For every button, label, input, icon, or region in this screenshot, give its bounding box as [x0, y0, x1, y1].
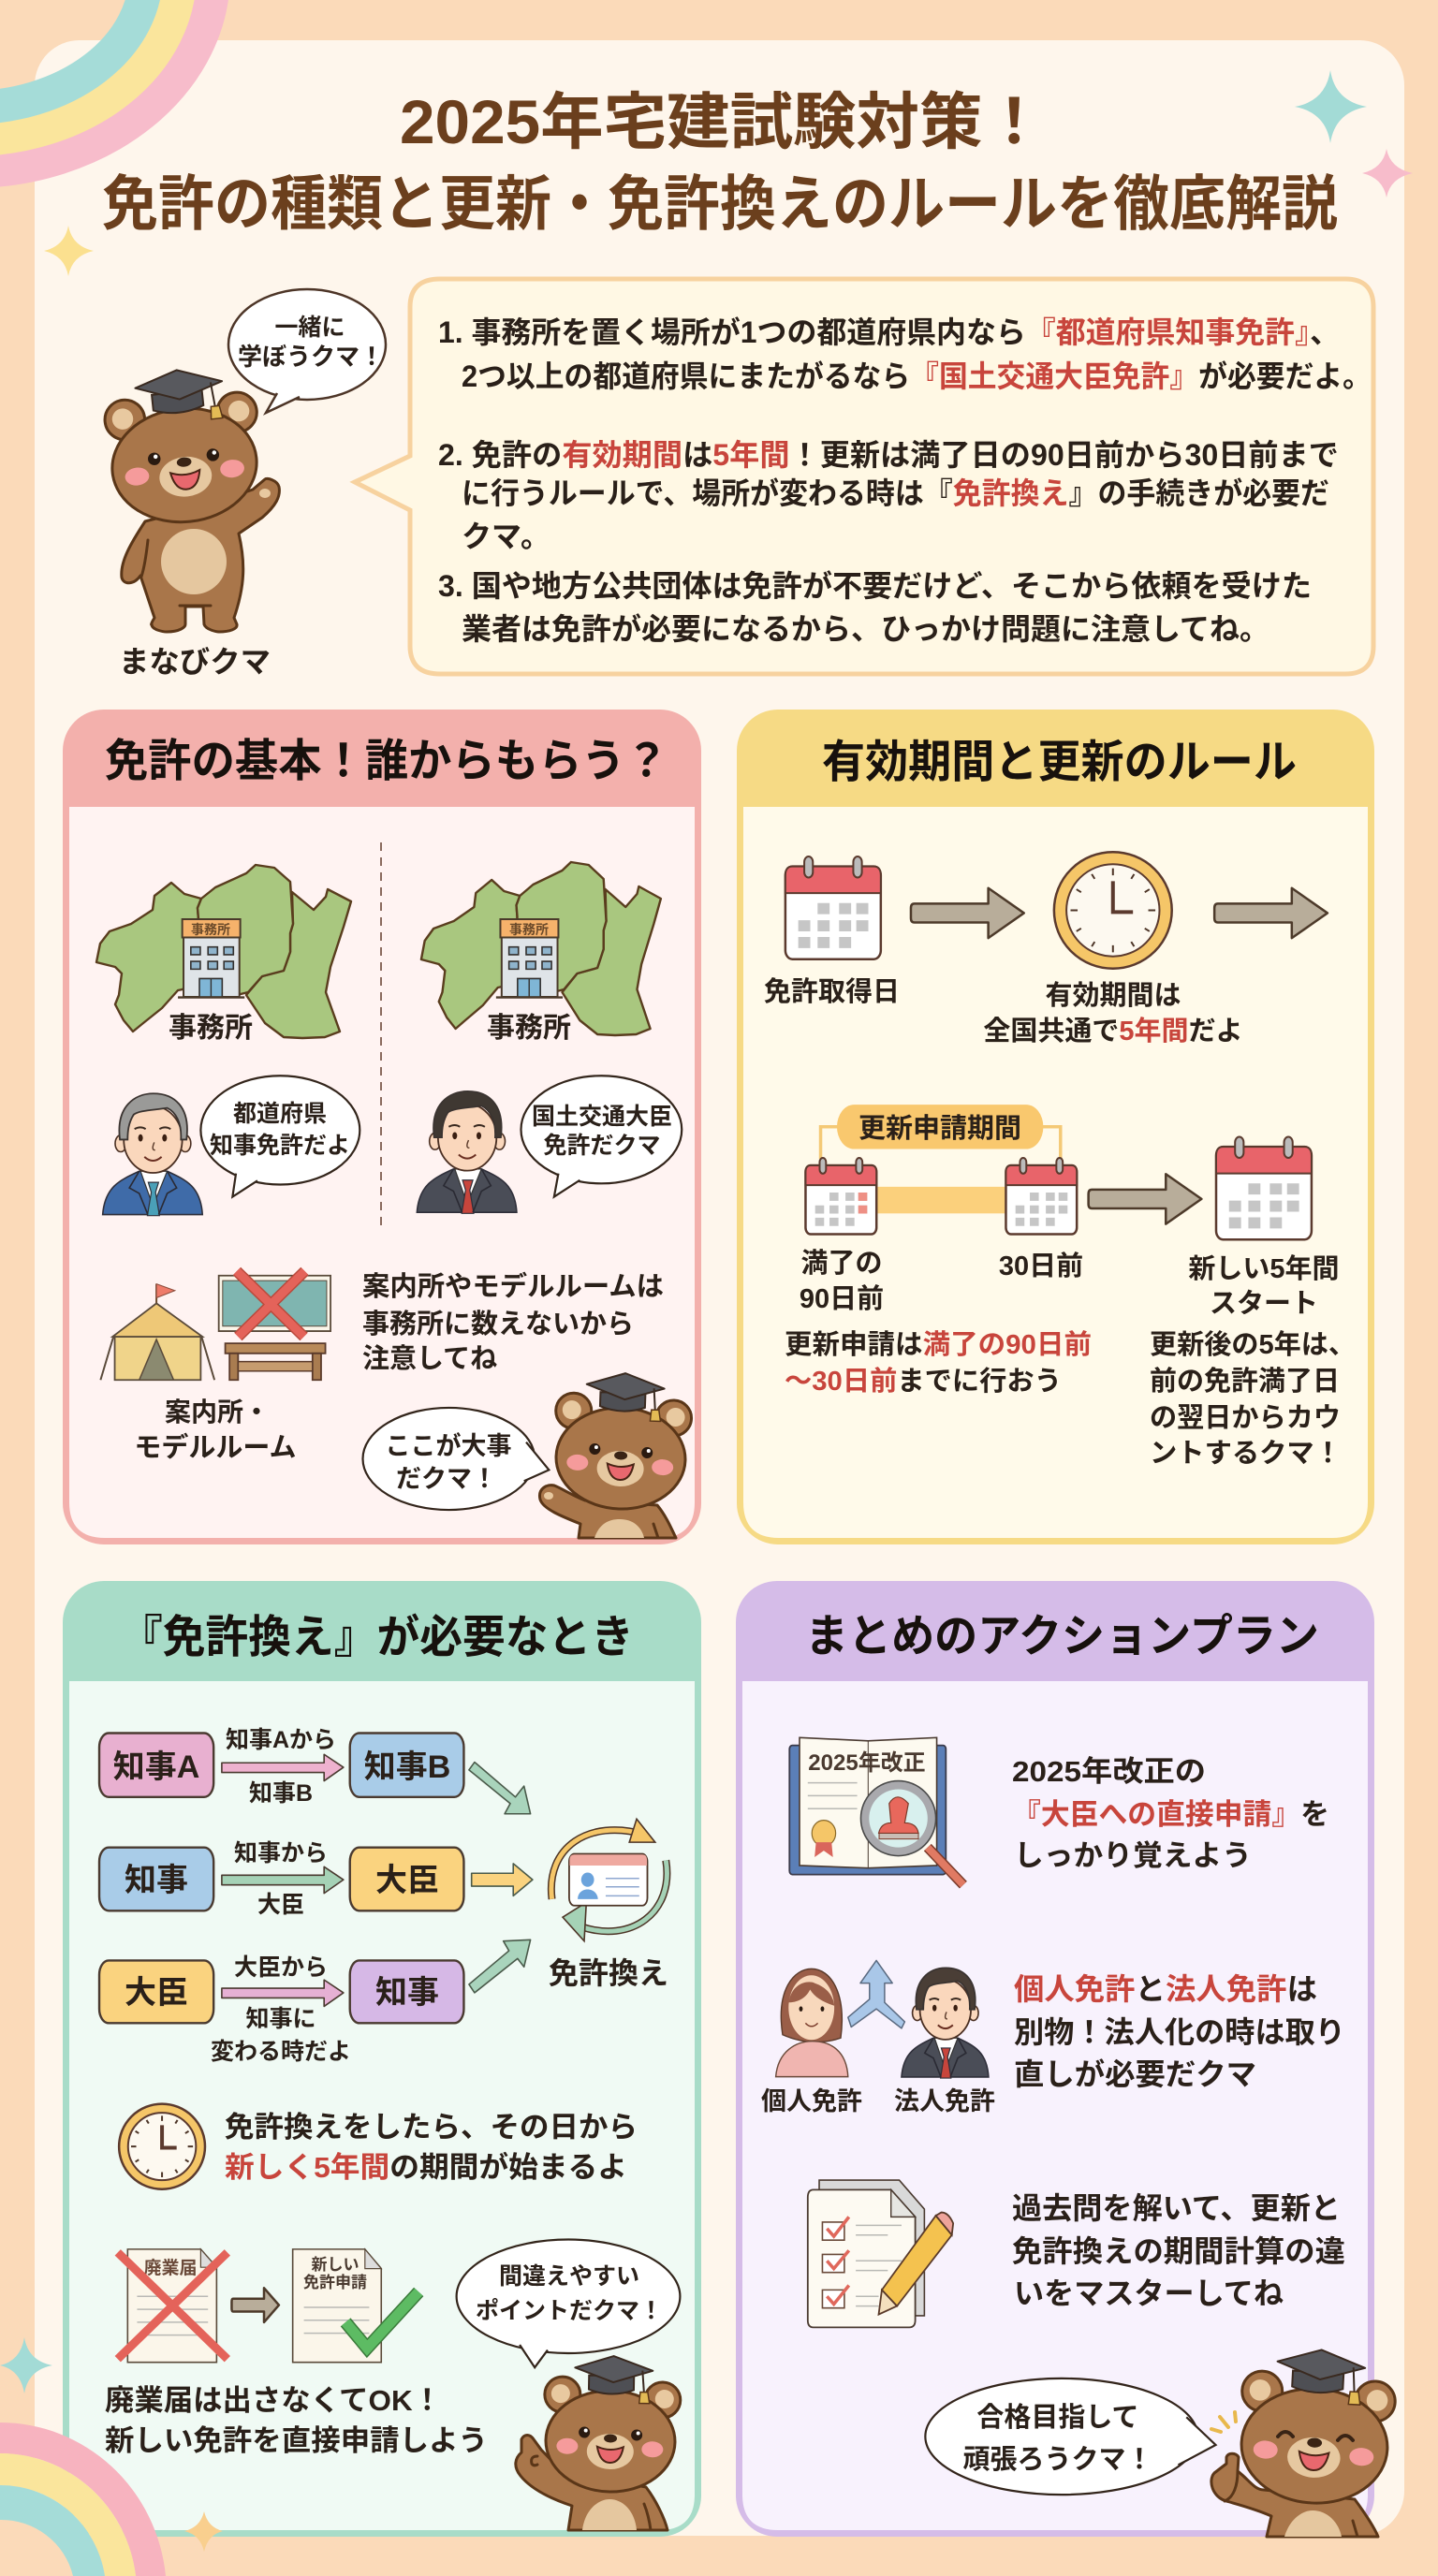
bubble: 合格目指して — [925, 2378, 1216, 2495]
icon: book and magnifier: 2025年改正 — [808, 1750, 926, 1776]
labels: 個人免許 法人免許: 法人免許 — [894, 2087, 995, 2115]
icon: calendar, 30 days before — [1005, 1158, 1077, 1235]
label: 更新申請期間: 更新申請期間 — [858, 1113, 1021, 1144]
box labels — [113, 1749, 450, 2011]
bubble: 知事免許: 都道府県 — [233, 1101, 327, 1127]
person: governor — [103, 1093, 202, 1216]
panel body — [69, 807, 695, 1538]
divider — [380, 842, 382, 1230]
icon: clock — [1054, 852, 1172, 969]
panel frame — [63, 710, 701, 1544]
bubble: 間違えやすい: 間違えやすい — [499, 2263, 639, 2290]
note: 更新申請 — [785, 1329, 1092, 1397]
icon: checklist and pencil — [808, 2180, 953, 2327]
panel: 免許の基本 — [63, 710, 701, 1544]
bear: thumbs up — [1211, 2346, 1398, 2537]
panel frame — [737, 710, 1374, 1544]
panel: intro summary: 業者は免許が必要になるから、ひっかけ問題に注意してね。 — [462, 612, 1269, 646]
note: 案内所: 案内所やモデルルームは — [362, 1270, 664, 1302]
panel frame — [63, 1581, 701, 2537]
heading: 免許の基本！誰からもらう？ — [105, 737, 668, 786]
text: 個人免許と法人免許: 個人免許と法人免許は — [1014, 1972, 1317, 2006]
bubble: ここが大事: ここが大事 — [386, 1431, 511, 1460]
arrow labels: 知事から — [234, 1840, 328, 1866]
note: 案内所: 注意してね — [362, 1343, 497, 1374]
bubble: 一緒に学ぼうクマ: 学ぼうクマ！ — [238, 343, 384, 371]
heading: まとめのアクションプラン — [805, 1612, 1319, 1661]
note: 廃業届: 新しい免許を直接申請しよう — [105, 2424, 488, 2457]
sparkle: orange bottom — [184, 2511, 223, 2552]
office sign text right: 事務所 — [509, 922, 549, 937]
person: minister — [417, 1091, 517, 1213]
text: 大臣への直接申請: 2025年改正の — [1012, 1755, 1206, 1788]
sparkle: teal bottom left — [0, 2337, 52, 2393]
bubble: 合格目指して: 合格目指して — [976, 2402, 1139, 2433]
panel: intro summary: クマ。 — [462, 520, 550, 553]
icon: calendar, 90 days before — [805, 1158, 876, 1235]
icon: new application: 免許申請 — [303, 2273, 367, 2291]
box labels: 大臣 — [375, 1863, 439, 1898]
label: 満了の90日前: 満了の — [800, 1248, 883, 1279]
label: 案内所・モデルルーム: モデルルーム — [134, 1431, 297, 1463]
arrow labels: 知事に — [245, 2006, 316, 2032]
arrow labels: 知事B — [249, 1780, 313, 1807]
text: 個人免許と法人免許: 直しが必要だクマ — [1014, 2057, 1256, 2091]
label: 案内所・モデルルーム: 案内所・ — [165, 1398, 270, 1427]
map: left with office — [96, 865, 351, 1038]
arrow labels: 大臣から — [234, 1954, 328, 1981]
labels: 個人免許 法人免許: 個人免許 — [761, 2087, 862, 2115]
icon: book and magnifier — [789, 1737, 963, 1885]
panel body — [743, 807, 1368, 1538]
renewal period bracket — [821, 1105, 1061, 1213]
icon: cheer marks — [1211, 2412, 1236, 2432]
bubble: 知事免許: 知事免許だよ — [210, 1133, 350, 1159]
icon: license card cycle — [551, 1819, 667, 1941]
box labels: 大臣 — [125, 1975, 188, 2011]
icon: new application — [293, 2249, 418, 2363]
text: 過去問: 過去問を解いて、更新と — [1012, 2191, 1341, 2225]
text: 過去問: 免許換えの期間計算の違 — [1012, 2234, 1345, 2268]
character: まなびクマ with speech bubble — [100, 289, 386, 679]
label: 新しい5年間: 新しい5年間 — [1188, 1253, 1340, 1284]
icon: calendar, license date — [785, 856, 881, 959]
icon: clock — [119, 2104, 205, 2189]
arrow 3 — [1089, 1174, 1201, 1224]
text: 大臣への直接申請 — [1012, 1755, 1329, 1872]
bubble: 一緒に学ぼうクマ — [228, 289, 386, 413]
icon: 廃業届 crossed — [118, 2249, 227, 2363]
arrow labels: 知事Aから — [226, 1727, 336, 1753]
bubble: 知事免許 — [200, 1076, 360, 1197]
sparkle: teal top right — [1295, 70, 1367, 143]
arrow 1 — [911, 888, 1024, 938]
office sign text left: 事務所 — [191, 922, 230, 937]
text: 大臣への直接申請: しっかり覚えよう — [1014, 1839, 1252, 1872]
point 1: 1. 事務所を置く場所が1つの都道府県内なら『都道府県知事免許』、 — [438, 315, 1340, 349]
note: 更新後の5年 — [1150, 1329, 1356, 1469]
label: 新しい5年間 — [1188, 1253, 1340, 1319]
note: 案内所: 事務所に数えないから — [362, 1309, 634, 1339]
note: 更新後の5年: 前の免許満了日 — [1150, 1366, 1340, 1397]
rainbow: bottom left — [0, 2422, 166, 2576]
bubble: ここが大事 — [363, 1408, 549, 1510]
bubble: 大臣免許 — [521, 1076, 682, 1197]
note: 廃業届: 廃業届は出さなくてOK！ — [105, 2384, 442, 2417]
icon: calendar, new start — [1216, 1136, 1312, 1239]
labels: 個人免許 法人免許 — [761, 2087, 995, 2115]
note: 更新後の5年: ントするクマ！ — [1150, 1439, 1342, 1469]
arrow labels — [211, 1727, 351, 2065]
label: 事務所 left: 事務所 — [169, 1013, 253, 1044]
text: 大臣への直接申請: 『大臣への直接申請』を — [1012, 1798, 1329, 1831]
panel: intro summary: 2つ以上の都道府県にまたがるなら『国土交通大臣免許』が必要だよ。 — [462, 359, 1372, 393]
arrows between boxes — [222, 1754, 344, 2006]
icon: new application: 新しい — [311, 2256, 360, 2274]
map: right with office — [421, 862, 661, 1035]
note: 新しく5年間: 免許換えをしたら、その日から — [225, 2111, 638, 2144]
box labels: 知事A — [113, 1749, 199, 1785]
heading: 有効期間と更新のルール — [822, 738, 1297, 787]
arrow: to new application — [231, 2288, 279, 2322]
heading: 『免許換え』が必要なとき — [120, 1613, 634, 1662]
bear: waving bottom right — [539, 1371, 693, 1538]
bubble: 大臣免許: 免許だクマ — [543, 1133, 661, 1159]
bubble: 一緒に学ぼうクマ: 一緒に — [274, 315, 345, 341]
note: 更新申請: 〜30日前までに行おう — [785, 1366, 1062, 1397]
rainbow: top left — [0, 0, 213, 171]
label: 案内所・モデルルーム — [134, 1398, 297, 1463]
panel: 有効期間と更新のルール — [737, 710, 1374, 1544]
note: 案内所 — [362, 1270, 664, 1374]
label: 有効期間: 有効期間は — [1045, 980, 1181, 1011]
arrow labels: 変わる時だよ — [211, 2039, 351, 2065]
note: 新しく5年間: 新しく5年間の期間が始まるよ — [225, 2151, 627, 2184]
panel: まとめのアクションプラン — [736, 1581, 1398, 2537]
bubble: 間違えやすい — [457, 2240, 680, 2367]
note: 更新後の5年: 更新後の5年は、 — [1150, 1329, 1356, 1360]
panel: 免許換え — [63, 1581, 701, 2537]
point 2: 2. 免許の有効期間は5年間！更新は満了日の90日前から30日前まで — [438, 438, 1339, 472]
box labels: 知事 — [125, 1863, 188, 1898]
bubble: 間違えやすい: ポイントだクマ！ — [476, 2298, 663, 2324]
text: 個人免許と法人免許: 別物！法人化の時は取り — [1014, 2015, 1345, 2049]
label: 有効期間: 全国共通で5年間だよ — [983, 1016, 1243, 1046]
text: 個人免許と法人免許 — [1014, 1972, 1345, 2091]
point 3: 3. 国や地方公共団体は免許が不要だけど、そこから依頼を受けた — [438, 569, 1312, 603]
boxes — [99, 1733, 463, 2023]
label: 免許換え: 免許換え — [549, 1956, 668, 1990]
panel body — [742, 1681, 1368, 2530]
arrows to 免許換え — [469, 1763, 533, 1993]
label: 満了の90日前 — [800, 1248, 884, 1314]
icon: merge arrow — [848, 1960, 904, 2028]
bubble: 大臣免許: 国土交通大臣 — [532, 1104, 672, 1130]
icon: model room crossed out — [219, 1271, 330, 1380]
icon: tent — [100, 1284, 214, 1380]
bear: waving — [100, 362, 279, 632]
note: 廃業届 — [105, 2384, 488, 2457]
label: 新しい5年間: スタート — [1210, 1288, 1318, 1319]
arrow labels: 大臣 — [257, 1892, 304, 1918]
bubble: 合格目指して: 頑張ろうクマ！ — [962, 2445, 1153, 2475]
bear: pointing — [516, 2355, 682, 2530]
note: 更新申請: 更新申請は満了の90日前 — [785, 1329, 1092, 1360]
title line 2: 免許の種類と更新・免許換えのルールを徹底解説 — [102, 170, 1338, 238]
bubble: ここが大事: だクマ！ — [396, 1465, 497, 1493]
text: 過去問: いをマスターしてね — [1014, 2276, 1284, 2310]
label: 30日前: 30日前 — [999, 1251, 1083, 1281]
icon: woman — [776, 1969, 848, 2077]
label: 免許取得日: 免許取得日 — [764, 976, 900, 1007]
title line 1: 2025年宅建試験対策！ — [400, 87, 1046, 156]
title — [102, 87, 1338, 238]
speech box — [355, 279, 1373, 674]
panel: intro summary — [355, 279, 1373, 674]
panel frame — [736, 1581, 1374, 2537]
name label: まなびクマ — [119, 645, 271, 679]
label: 満了の90日前: 90日前 — [800, 1283, 884, 1314]
box labels: 知事B — [364, 1749, 450, 1785]
text: 過去問 — [1012, 2191, 1345, 2310]
arrow 2 — [1214, 888, 1328, 938]
icon: 廃業届 crossed: 廃業届 — [143, 2257, 198, 2278]
sparkle: pink top right — [1362, 149, 1413, 198]
sparkle: yellow left — [44, 226, 94, 276]
label: 事務所 right: 事務所 — [487, 1013, 571, 1044]
note: 更新後の5年: の翌日からカウ — [1150, 1403, 1341, 1433]
icon: man — [902, 1968, 989, 2078]
note: 新しく5年間 — [225, 2111, 638, 2184]
label: 有効期間 — [983, 980, 1243, 1046]
panel: intro summary: に行うルールで、場所が変わる時は『免許換え』の手続きが必要だ — [462, 476, 1329, 510]
panel body — [69, 1681, 695, 2530]
box labels: 知事 — [375, 1975, 439, 2011]
